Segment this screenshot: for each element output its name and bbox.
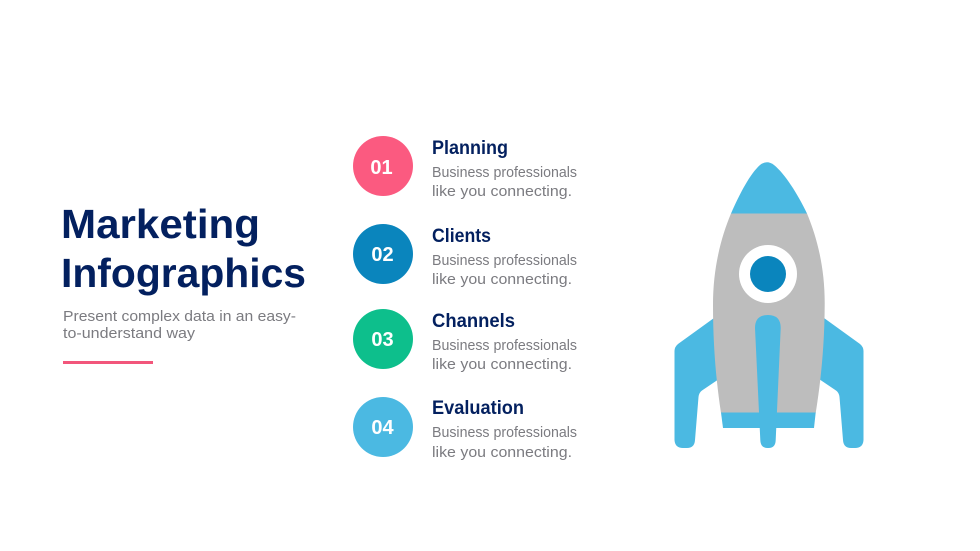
accent underline [63,361,153,364]
item 03: channels: 03 [371,329,394,351]
nose cone [731,162,807,214]
item 02: clients: like you connecting. [432,271,572,288]
item 02: clients: Clients [432,226,491,247]
left fin [674,318,719,448]
item 01: planning: like you connecting. [432,183,572,200]
subtitle: Present complex data in an easy- [63,308,296,325]
title [61,201,306,296]
item 04: evaluation [353,397,577,461]
subtitle: to-understand way [63,325,196,342]
title: Infographics [61,250,306,296]
subtitle [63,308,296,342]
item 03: channels: like you connecting. [432,356,572,373]
item 02: clients: 02 [371,244,394,266]
center fin [755,315,781,448]
right fin [819,318,864,448]
icon: rocket [674,162,864,448]
item 04: evaluation: 04 [371,417,394,439]
item 03: channels: Channels [432,311,515,332]
item 04: evaluation: Business professionals [432,424,577,441]
base band [721,412,816,428]
item 02: clients: Business professionals [432,252,577,269]
item 01: planning [353,136,577,200]
item 02: clients [353,224,577,288]
item 03: channels: Business professionals [432,337,577,354]
body [713,214,825,413]
title: Marketing [61,201,260,247]
item 04: evaluation: like you connecting. [432,444,572,461]
item 03: channels [353,309,577,373]
item 01: planning: 01 [370,157,393,179]
item 04: evaluation: Evaluation [432,398,524,419]
item 01: planning: Business professionals [432,164,577,181]
item 01: planning: Planning [432,138,508,159]
window [739,245,797,303]
